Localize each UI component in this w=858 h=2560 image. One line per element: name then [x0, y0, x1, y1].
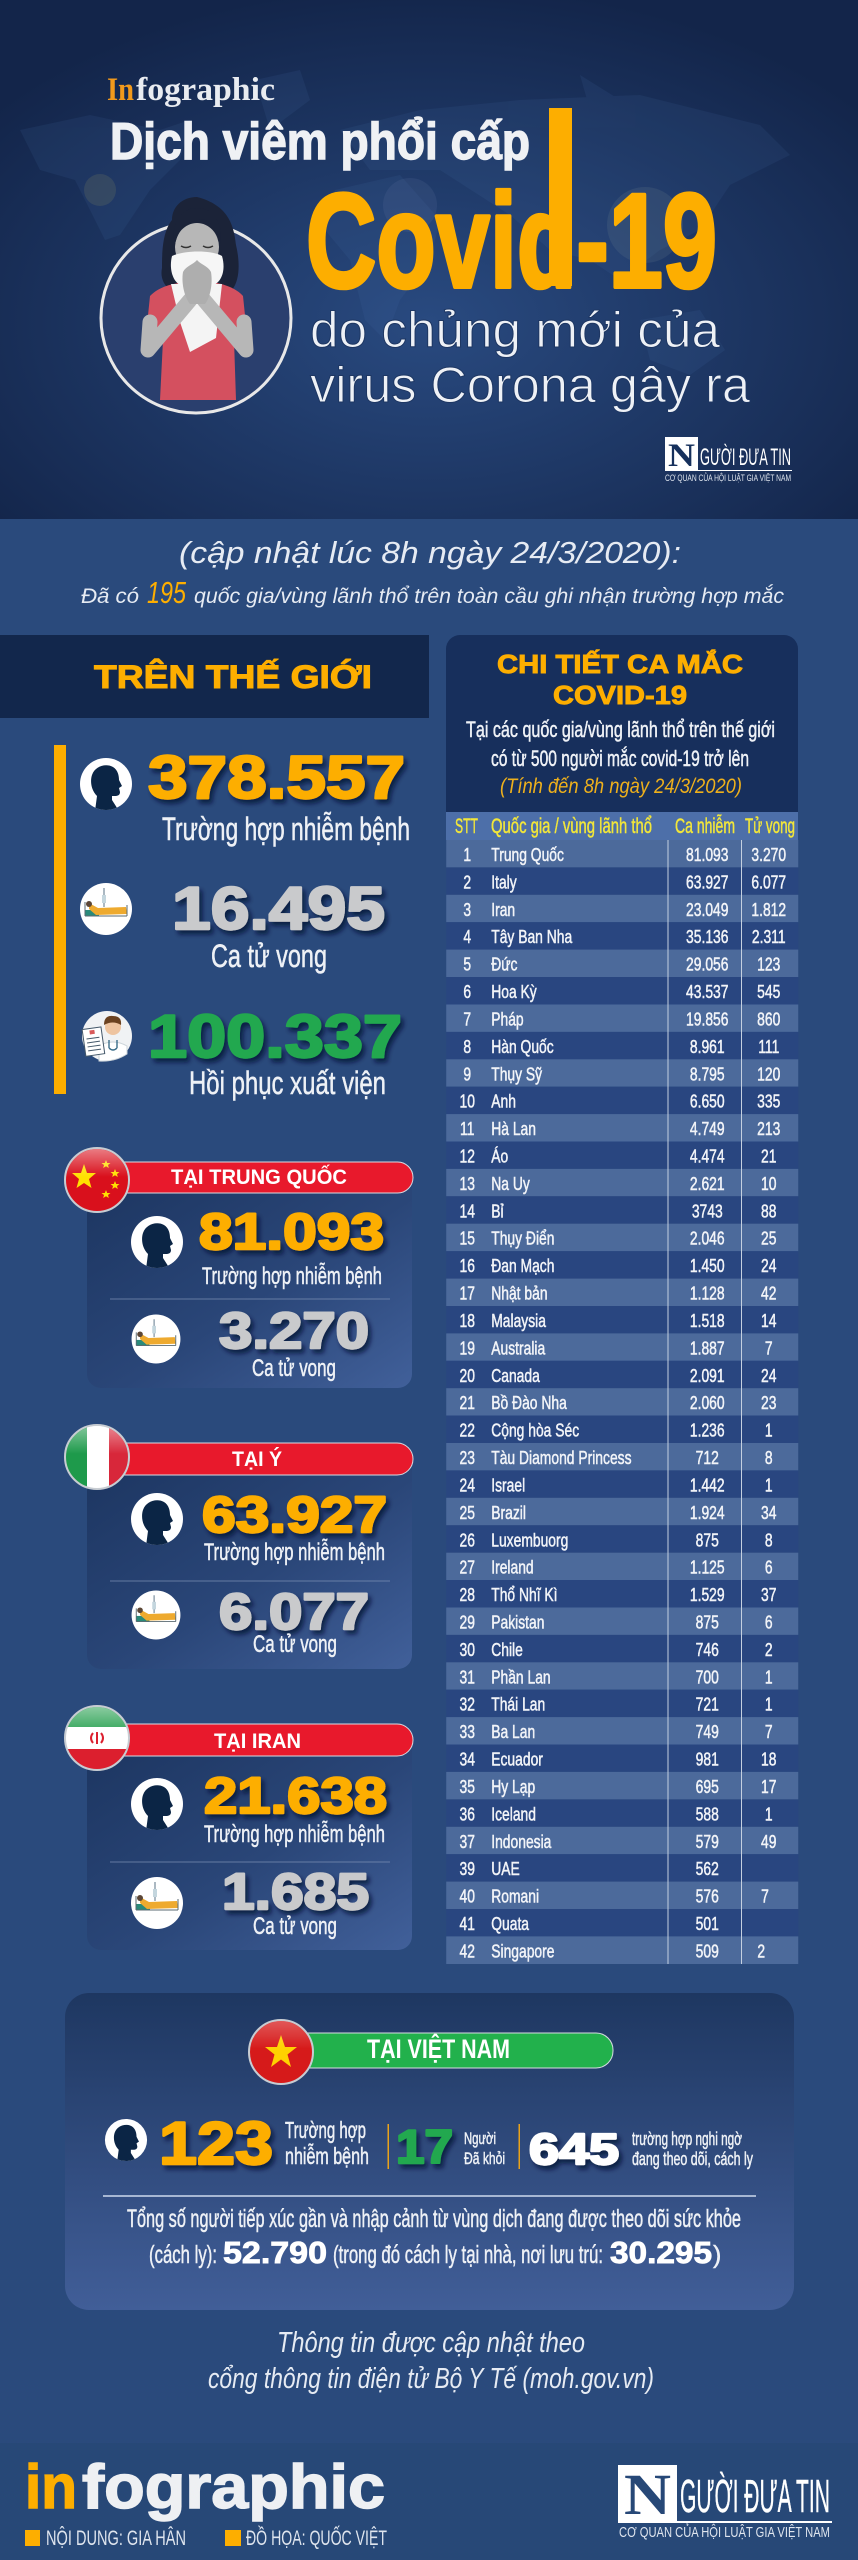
subtitle: do chủng mới của: [310, 302, 720, 358]
label: Vietnam recovered: Đã khỏi: [464, 2149, 505, 2168]
table rows: 4: [463, 927, 471, 948]
table rows: 23: [761, 1393, 776, 1414]
table rows: 111: [758, 1037, 779, 1057]
logo: infographic: in: [25, 2453, 77, 2522]
text: monitoring total: 30.295: [610, 2235, 712, 2270]
table rows: 42: [460, 1942, 475, 1962]
table rows: 1.518: [690, 1311, 725, 1332]
table rows: 24: [460, 1476, 475, 1496]
credit: content: NỘI DUNG: GIA HÂN: [46, 2527, 186, 2550]
logo: Người Đưa Tin (header): N: [668, 438, 695, 474]
world map background: [20, 70, 790, 390]
number: Italy cases: 63.927: [202, 1486, 387, 1543]
table rows: 23.049: [686, 900, 728, 920]
number: China deaths: 3.270: [219, 1302, 369, 1359]
table rows: 21: [761, 1147, 776, 1167]
banner: Italy: TẠI Ý: [232, 1447, 282, 1471]
text: monitoring total: [127, 2205, 741, 2270]
label: world recovered: Hồi phục xuất viện: [189, 1065, 386, 1101]
text: monitoring total: (trong đó cách ly tại nhà, nơi lưu trú:: [333, 2241, 603, 2269]
summary line: 195: [147, 575, 187, 610]
table rows: 19.856: [686, 1010, 728, 1030]
table rows: 8.795: [690, 1064, 725, 1085]
panel: world heading: TRÊN THẾ GIỚI: [94, 659, 372, 695]
table rows: Malaysia: [491, 1311, 547, 1332]
table rows: 335: [757, 1092, 780, 1112]
table rows: 7: [463, 1010, 471, 1030]
panel: world heading: [0, 635, 429, 718]
panel: Vietnam: [65, 1993, 794, 2310]
table rows: 8: [765, 1530, 773, 1551]
label: Vietnam suspected: trường hợp nghi ngờ: [632, 2129, 742, 2149]
table rows: Iceland: [491, 1805, 536, 1825]
table rows: 34: [460, 1750, 475, 1770]
table rows: 32: [460, 1695, 475, 1715]
table rows: Indonesia: [491, 1832, 552, 1852]
table rows: Trung Quốc: [491, 845, 564, 866]
text: monitoring total: (cách ly):: [149, 2241, 217, 2269]
table rows: 1.924: [690, 1503, 725, 1523]
table rows: 7: [761, 1887, 769, 1907]
table rows: 562: [696, 1859, 719, 1880]
banner: Iran: [100, 1724, 413, 1756]
table rows: 14: [460, 1201, 475, 1222]
table rows: Hàn Quốc: [491, 1037, 554, 1057]
table rows: 6: [765, 1558, 773, 1578]
logo: Người Đưa Tin (footer): [618, 2462, 832, 2541]
table rows: 81.093: [686, 845, 728, 866]
table rows: 29.056: [686, 955, 728, 975]
table rows: 25: [761, 1229, 776, 1249]
table rows: 10: [761, 1174, 776, 1194]
panel: China: [65, 1148, 413, 1388]
text: monitoring total: 52.790: [223, 2235, 327, 2270]
table rows: Ecuador: [491, 1750, 543, 1770]
table rows: 1.236: [690, 1421, 725, 1441]
table rows: 579: [696, 1832, 719, 1852]
table rows: 2: [765, 1640, 773, 1660]
table rows: Pháp: [491, 1010, 524, 1030]
table rows: 39: [460, 1859, 475, 1880]
table rows: 26: [460, 1530, 475, 1551]
table rows: 8: [463, 1037, 471, 1057]
label: China cases: Trường hợp nhiễm bệnh: [202, 1263, 382, 1290]
table rows: 49: [761, 1832, 776, 1852]
table rows: 12: [460, 1147, 475, 1167]
text: monitoring total: ): [713, 2241, 721, 2269]
title: Covid-19: [306, 108, 717, 316]
table rows: Bỉ: [491, 1201, 504, 1222]
number: world cases: 378.557: [148, 744, 405, 811]
icon: head: [131, 1778, 183, 1831]
label: Vietnam cases: nhiễm bệnh: [285, 2143, 369, 2169]
table rows: 700: [696, 1667, 719, 1688]
table rows: 31: [460, 1667, 475, 1688]
table rows: 501: [696, 1914, 719, 1935]
icon: head: [131, 1216, 183, 1269]
table rows: Ireland: [491, 1558, 534, 1578]
icon: doctor: [82, 1011, 132, 1061]
table rows: 576: [696, 1887, 719, 1907]
table rows: 11: [460, 1119, 474, 1140]
table rows: 2.091: [690, 1366, 725, 1386]
banner: Italy: [100, 1443, 413, 1475]
icon: Italy flag: [65, 1425, 129, 1489]
table rows: 33: [460, 1722, 475, 1743]
table rows: 7: [765, 1339, 773, 1359]
table rows: 588: [696, 1805, 719, 1825]
table rows: 6.077: [751, 873, 786, 893]
table rows: 545: [757, 982, 780, 1003]
icon: hospital bed: [131, 1877, 183, 1929]
table rows: 17: [460, 1284, 475, 1304]
table rows: 25: [460, 1503, 475, 1523]
table header row: Quốc gia / vùng lãnh thổ: [491, 815, 652, 838]
panel: header: [0, 0, 858, 519]
table rows: Thổ Nhĩ Kì: [491, 1585, 558, 1606]
table rows: UAE: [491, 1859, 520, 1880]
table rows: 6: [765, 1613, 773, 1633]
summary line: quốc gia/vùng lãnh thổ trên toàn cầu ghi nhận trường hợp mắc: [194, 585, 784, 608]
table rows: 18: [761, 1750, 776, 1770]
icon: head: [80, 758, 132, 811]
table rows: 18: [460, 1311, 475, 1332]
icon: China flag: [65, 1148, 129, 1212]
table rows: 19: [460, 1339, 475, 1359]
table rows: 4.474: [690, 1147, 725, 1167]
table rows: 749: [696, 1722, 719, 1743]
banner: China: TẠI TRUNG QUỐC: [171, 1165, 347, 1189]
table rows: 37: [460, 1832, 475, 1852]
table rows: 7: [765, 1722, 773, 1743]
label: Vietnam recovered: Người: [464, 2129, 496, 2148]
icon: hospital bed: [132, 1315, 180, 1363]
table rows: Luxembuorg: [491, 1530, 568, 1551]
banner: Vietnam: TẠI VIỆT NAM: [367, 2033, 510, 2064]
number: China cases: 81.093: [199, 1203, 384, 1260]
icon: Vietnam flag: [249, 2020, 313, 2084]
table rows: 21: [460, 1393, 475, 1414]
table rows: 1.125: [690, 1558, 725, 1578]
table rows: 28: [460, 1585, 475, 1606]
table rows: 16: [460, 1256, 475, 1277]
table header row: Tử vong: [745, 815, 795, 838]
table title block: [446, 635, 798, 812]
table rows: 22: [460, 1421, 475, 1441]
table rows: 13: [460, 1174, 475, 1194]
table rows: Quata: [491, 1914, 530, 1935]
table rows: 30: [460, 1640, 475, 1660]
table rows: Tàu Diamond Princess: [491, 1448, 632, 1469]
banner: Vietnam: [290, 2033, 613, 2068]
table title block: có từ 500 người mắc covid-19 trở lên: [491, 746, 749, 771]
table rows: 3.270: [751, 845, 786, 866]
table rows: 2.046: [690, 1229, 725, 1249]
table rows: Chile: [491, 1640, 523, 1660]
table rows: 15: [460, 1229, 475, 1249]
table rows: 2: [463, 873, 471, 893]
table rows: Tây Ban Nha: [491, 927, 573, 948]
label: Iran deaths: Ca tử vong: [253, 1913, 337, 1940]
table rows: 875: [696, 1530, 719, 1551]
label: Vietnam suspected: [632, 2129, 753, 2169]
number: world recovered: 100.337: [148, 1003, 402, 1070]
icon: head: [131, 1493, 183, 1546]
banner: China: [100, 1162, 413, 1193]
subtitle: [310, 302, 750, 413]
table rows: 9: [463, 1064, 471, 1085]
table rows: 5: [463, 955, 471, 975]
table rows: 1.812: [751, 900, 786, 920]
table rows: Singapore: [491, 1942, 554, 1962]
table rows: 1: [765, 1421, 773, 1441]
table rows: Italy: [491, 873, 517, 893]
table title block: (Tính đến 8h ngày 24/3/2020): [500, 775, 742, 798]
icon: head: [105, 2119, 147, 2162]
table rows: 875: [696, 1613, 719, 1633]
label: Italy cases: Trường hợp nhiễm bệnh: [204, 1539, 385, 1566]
table rows: Cộng hòa Séc: [491, 1421, 579, 1441]
summary line: [81, 575, 784, 610]
table title block: CHI TIẾT CA MẮC: [497, 649, 743, 679]
table rows: Thái Lan: [491, 1695, 545, 1715]
table rows: 24: [761, 1256, 776, 1277]
label: Vietnam cases: Trường hợp: [285, 2117, 366, 2143]
table rows: 1: [765, 1805, 773, 1825]
table rows: 17: [761, 1777, 776, 1797]
table rows: 746: [696, 1640, 719, 1660]
table header row: Ca nhiễm: [675, 815, 735, 838]
table rows: 8.961: [690, 1037, 725, 1057]
table rows: 1: [765, 1695, 773, 1715]
credit: graphics: ĐỒ HỌA: QUỐC VIỆT: [246, 2526, 387, 2550]
label: Italy deaths: Ca tử vong: [253, 1631, 337, 1658]
icon: hospital bed: [80, 883, 132, 935]
number: Vietnam recovered: 17: [396, 2120, 453, 2173]
logo: Người Đưa Tin (header): [665, 437, 792, 483]
table rows: 8: [765, 1448, 773, 1469]
title: Infographic label: In: [107, 72, 134, 108]
banner: Iran: TẠI IRAN: [214, 1730, 301, 1753]
table rows: 3743: [692, 1201, 723, 1222]
table rows: 29: [460, 1613, 475, 1633]
table rows: 40: [460, 1887, 475, 1907]
title: Covid-19: Covid-19: [306, 167, 717, 316]
table rows: 43.537: [686, 982, 728, 1003]
table rows: 6.650: [690, 1092, 725, 1112]
table rows: Thụy Điển: [491, 1229, 554, 1249]
table rows: 712: [696, 1448, 719, 1469]
icon: hospital bed: [132, 1591, 180, 1639]
table rows: 63.927: [686, 873, 728, 893]
table rows: 695: [696, 1777, 719, 1797]
table rows: Na Uy: [491, 1174, 530, 1194]
table header row: STT: [455, 815, 478, 838]
table rows: 1: [765, 1476, 773, 1496]
table rows: 4.749: [690, 1119, 725, 1140]
table rows: Brazil: [491, 1503, 526, 1523]
table rows: Đan Mạch: [491, 1256, 554, 1277]
table rows: Đức: [491, 955, 517, 975]
table rows: 23: [460, 1448, 475, 1469]
credit: content: [25, 2527, 186, 2550]
table rows: Hy Lạp: [491, 1777, 535, 1797]
number: world deaths: 16.495: [172, 875, 385, 942]
subtitle: virus Corona gây ra: [310, 357, 750, 413]
table rows: 37: [761, 1585, 776, 1606]
table rows: 88: [761, 1201, 776, 1222]
table rows: 1.529: [690, 1585, 725, 1606]
table rows: 42: [761, 1284, 776, 1304]
credit: graphics: [225, 2526, 387, 2550]
table rows: 36: [460, 1805, 475, 1825]
table rows: 24: [761, 1366, 776, 1386]
table rows: 35: [460, 1777, 475, 1797]
table title block: COVID-19: [553, 680, 687, 710]
table rows: 120: [757, 1064, 780, 1085]
table rows: Israel: [491, 1476, 525, 1496]
panel: footer: [0, 2443, 858, 2560]
table rows: 3: [463, 900, 471, 920]
panel: Italy: [65, 1425, 413, 1669]
table rows: Ba Lan: [491, 1722, 535, 1743]
number: Italy deaths: 6.077: [219, 1583, 369, 1640]
table rows: 123: [757, 955, 780, 975]
number: Iran cases: 21.638: [204, 1767, 387, 1824]
table rows: 27: [460, 1558, 475, 1578]
table rows: Phần Lan: [491, 1667, 551, 1688]
table rows: Hoa Kỳ: [491, 982, 537, 1003]
table rows: Áo: [491, 1146, 508, 1167]
table rows: 20: [460, 1366, 475, 1386]
panel: world statistics: [54, 744, 410, 1101]
logo: infographic: fographic: [82, 2453, 385, 2522]
table rows: Thụy Sỹ: [491, 1064, 543, 1085]
table rows: 1.887: [690, 1339, 725, 1359]
table rows: Romani: [491, 1887, 539, 1907]
table rows: Canada: [491, 1366, 541, 1386]
table rows: 10: [460, 1092, 475, 1112]
panel: country detail table: [446, 635, 798, 1964]
table rows: 14: [761, 1311, 776, 1332]
table rows: 981: [696, 1750, 719, 1770]
table rows: 1: [765, 1667, 773, 1688]
number: Vietnam suspected: 645: [529, 2125, 619, 2174]
title: Infographic label: fographic: [136, 72, 275, 108]
table rows: 1: [463, 845, 471, 866]
title: disease name: Dịch viêm phổi cấp: [110, 113, 530, 171]
table rows: 2: [757, 1942, 765, 1962]
table header row: [446, 812, 798, 840]
table rows: 1.128: [690, 1284, 725, 1304]
source note: Thông tin được cập nhật theo: [277, 2327, 585, 2359]
number: Iran deaths: 1.685: [222, 1863, 369, 1920]
label: world deaths: Ca tử vong: [211, 938, 327, 974]
table rows: 35.136: [686, 927, 728, 948]
summary line: Đã có: [81, 585, 139, 608]
table rows: Bồ Đào Nha: [491, 1393, 568, 1414]
table rows: 213: [757, 1119, 780, 1140]
label: Vietnam cases: [285, 2117, 369, 2169]
label: Vietnam recovered: [464, 2129, 505, 2168]
table rows: 1.442: [690, 1476, 725, 1496]
table rows: Australia: [491, 1339, 546, 1359]
logo: Người Đưa Tin (header): CƠ QUAN CỦA HỘI LUẬT GIA VIỆT NAM: [665, 472, 791, 483]
panel: Iran: [65, 1706, 413, 1950]
label: world cases: Trường hợp nhiễm bệnh: [162, 811, 410, 847]
label: China deaths: Ca tử vong: [252, 1355, 336, 1382]
table rows: Pakistan: [491, 1613, 544, 1633]
table rows: 34: [761, 1503, 776, 1523]
logo: Người Đưa Tin (footer): N: [624, 2462, 671, 2527]
table rows: Nhật bản: [491, 1284, 548, 1304]
table rows: 509: [696, 1942, 719, 1962]
table rows: [446, 840, 798, 1964]
table rows: 6: [463, 982, 471, 1003]
table rows: 41: [460, 1914, 475, 1935]
table rows: 2.060: [690, 1393, 725, 1414]
source note: [208, 2327, 654, 2395]
label: Iran cases: Trường hợp nhiễm bệnh: [204, 1821, 385, 1848]
icon: woman sneezing in a circle: [101, 197, 291, 413]
table rows: 2.311: [752, 927, 786, 948]
table rows: 1.450: [690, 1256, 725, 1277]
table rows: 2.621: [690, 1174, 725, 1194]
table rows: Anh: [491, 1092, 516, 1112]
table rows: 721: [696, 1695, 719, 1715]
table rows: Iran: [491, 900, 515, 920]
update date line: (cập nhật lúc 8h ngày 24/3/2020):: [179, 535, 681, 570]
number: Vietnam cases: 123: [159, 2110, 273, 2177]
table rows: Hà Lan: [491, 1119, 536, 1140]
source note: cổng thông tin điện tử Bộ Y Tế (moh.gov.vn): [208, 2363, 654, 2395]
table rows: 860: [757, 1010, 780, 1030]
icon: Iran flag: [65, 1706, 129, 1770]
label: Vietnam suspected: đang theo dõi, cách ly: [632, 2149, 753, 2169]
